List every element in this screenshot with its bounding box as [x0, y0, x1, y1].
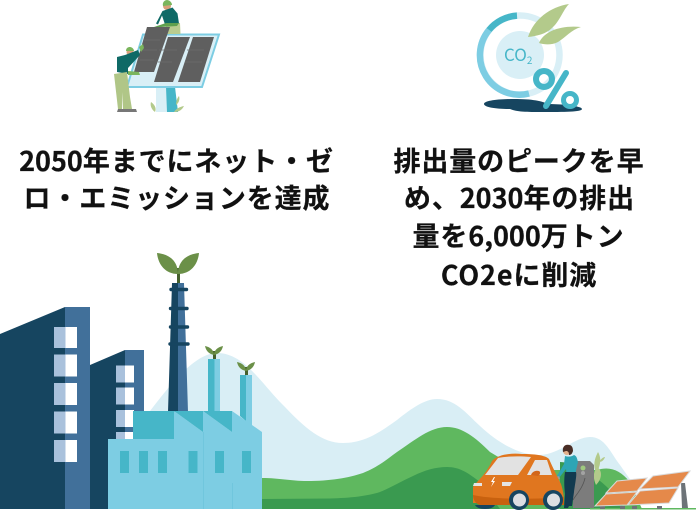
lightning bolt: [491, 477, 495, 487]
ring: [480, 16, 560, 94]
heading: net zero by 2050: ロ・エミッションを達成: [24, 177, 330, 216]
CO2 label: CO: [504, 41, 527, 66]
icon: workers installing solar panel: [114, 0, 219, 112]
small chimneys with sprouts: [205, 346, 255, 427]
heading: peak emissions early: 量を6,000万トン: [412, 215, 625, 254]
car windows: [485, 456, 531, 475]
windows: [116, 366, 134, 440]
building: short left: [90, 350, 144, 509]
heading: peak emissions early: CO2eに削減: [441, 254, 597, 293]
person and charging station: [555, 445, 605, 508]
wheels: [475, 505, 495, 509]
smokestack with sprout: [157, 253, 199, 412]
percent sign: [536, 71, 576, 106]
leaves: [528, 4, 581, 44]
heading: peak emissions early: 排出量のピークを早: [393, 140, 645, 179]
heading: peak emissions early: め、2030年の排出: [404, 177, 635, 216]
heading: peak emissions early: [393, 140, 645, 293]
windows: [54, 327, 77, 462]
heading: net zero by 2050: 2050年までにネット・ゼ: [19, 140, 334, 179]
factory windows: [120, 451, 251, 473]
landscape: hills: [150, 353, 696, 510]
inner circle: [496, 31, 544, 79]
factory: [108, 411, 262, 509]
electric car: [473, 454, 564, 510]
building: tall left: [0, 307, 90, 509]
CO2 label: 2: [527, 52, 533, 67]
shadow: [484, 99, 582, 112]
solar panel array: [595, 471, 690, 509]
icon: CO2 reduction percent: [480, 4, 582, 112]
heading: net zero by 2050: [19, 140, 334, 216]
